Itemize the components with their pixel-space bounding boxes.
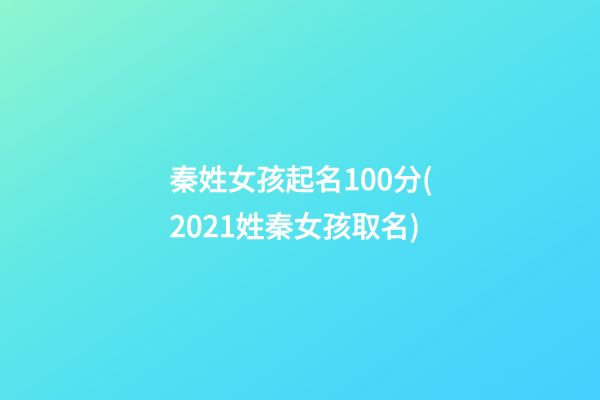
title [170,157,432,246]
title line 1: 秦姓女孩起名100分( [170,157,432,199]
title line 2: 2021姓秦女孩取名) [170,204,420,246]
